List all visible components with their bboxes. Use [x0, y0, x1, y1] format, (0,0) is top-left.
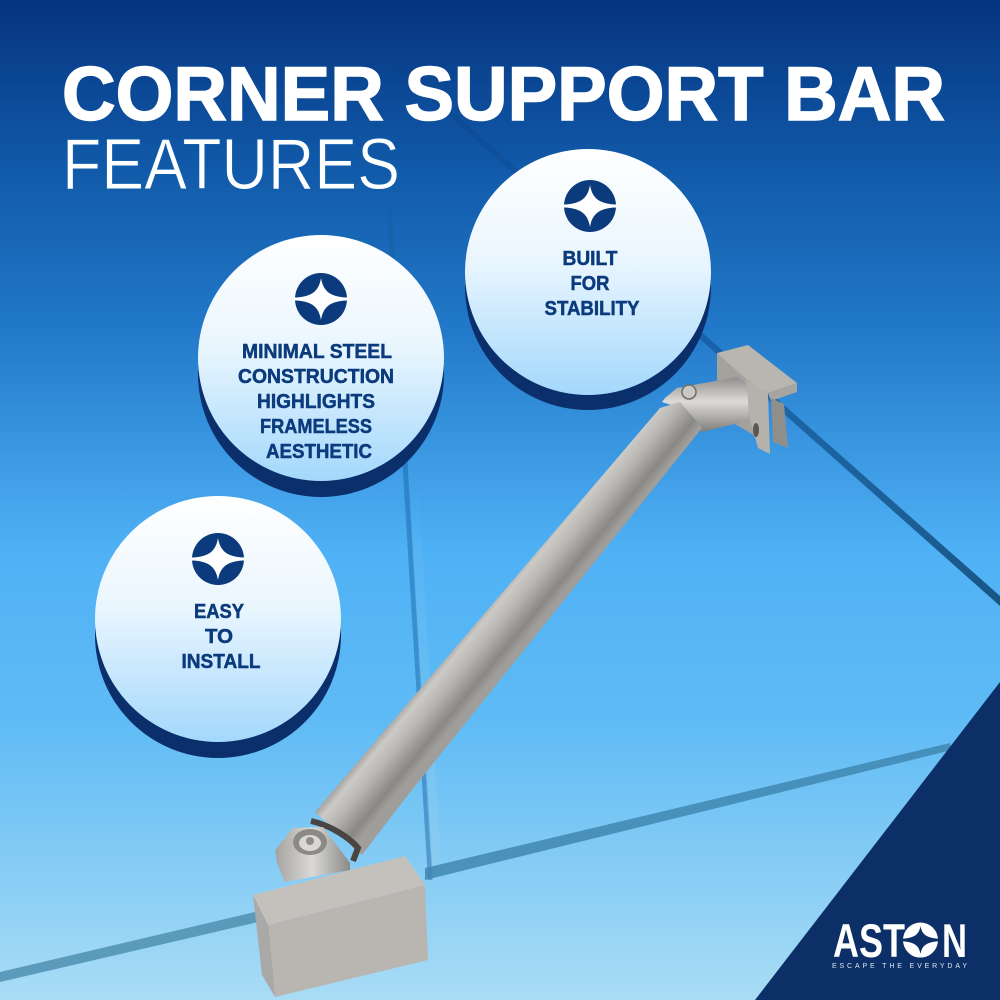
- corner triangle: [755, 682, 1000, 1000]
- top bracket: [717, 345, 797, 454]
- callout text: AESTHETIC: [266, 441, 372, 463]
- callout text: TO: [205, 626, 233, 648]
- callout text: FOR: [570, 273, 610, 295]
- top swivel joint: [662, 377, 749, 432]
- callout text: [544, 248, 640, 320]
- callout text: FRAMELESS: [260, 416, 372, 438]
- callout text: BUILT: [562, 248, 618, 270]
- tube: [315, 402, 702, 855]
- callout text: [182, 601, 260, 673]
- callout: minimal steel construction: [198, 235, 444, 497]
- icon: star badge: [564, 180, 616, 232]
- bottom bracket: [253, 856, 428, 997]
- dark collar: [311, 821, 358, 861]
- callout text: HIGHLIGHTS: [257, 391, 375, 413]
- logo: N: [942, 914, 967, 967]
- bottom swivel joint: [275, 827, 350, 882]
- callout text: [238, 341, 394, 463]
- title: [62, 52, 945, 205]
- callout text: INSTALL: [182, 651, 260, 673]
- subtitle: FEATURES: [62, 125, 400, 205]
- callout text: CONSTRUCTION: [238, 366, 394, 388]
- icon: star badge: [295, 273, 347, 325]
- callout: easy to install: [95, 496, 341, 758]
- logo: O: [903, 914, 938, 967]
- title: CORNER SUPPORT BAR: [62, 52, 945, 137]
- support bar: [253, 345, 797, 997]
- logo: AST: [833, 914, 905, 967]
- callout text: MINIMAL STEEL: [242, 341, 392, 363]
- callout text: EASY: [194, 601, 245, 623]
- tagline: ESCAPE THE EVERYDAY: [832, 963, 967, 970]
- logo: [832, 914, 967, 970]
- icon: star badge: [192, 533, 244, 585]
- callout text: STABILITY: [544, 298, 640, 320]
- callout: built for stability: [465, 149, 711, 410]
- icon: logo star: [898, 922, 942, 958]
